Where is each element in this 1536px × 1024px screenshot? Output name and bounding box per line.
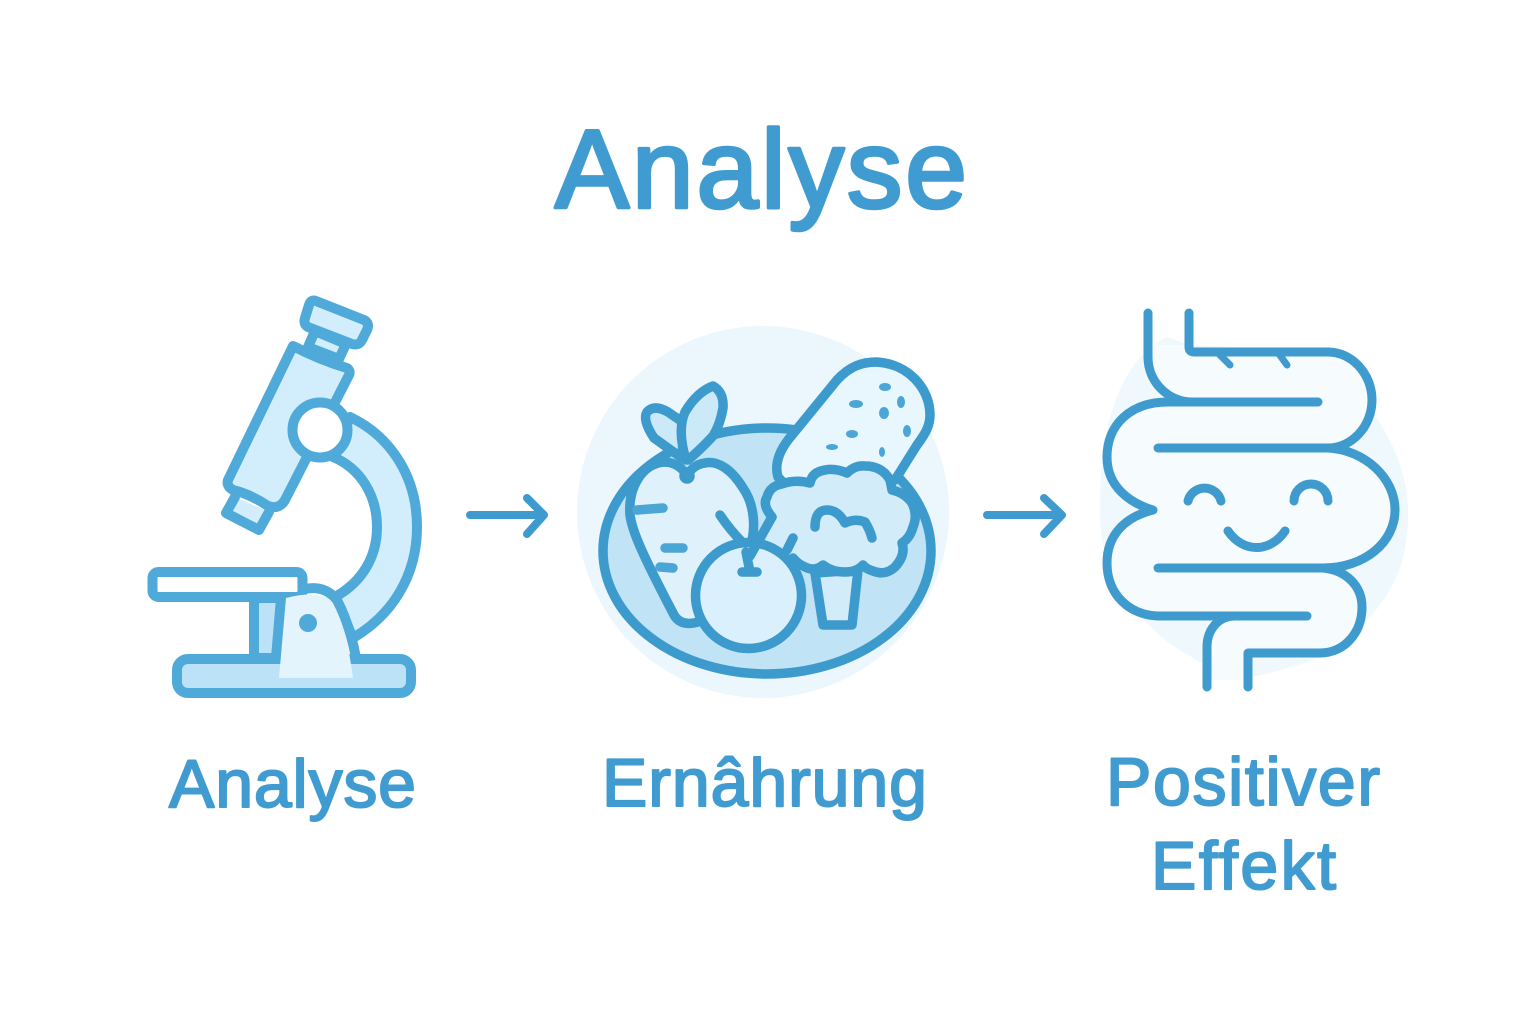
apple [696, 542, 802, 648]
broccoli stem [815, 570, 858, 625]
microscope knob [299, 614, 317, 632]
microscope pillar band [271, 598, 287, 658]
cucumber [777, 362, 930, 500]
plate [603, 428, 931, 674]
background blob [1100, 337, 1408, 678]
microscope arm [333, 417, 417, 638]
label: Positiver Effekt: Effekt [1151, 828, 1336, 904]
microscope body [279, 594, 353, 678]
carrot [630, 462, 754, 623]
intestine small ticks [1219, 354, 1287, 365]
label: Analyse: Analyse [169, 746, 416, 822]
intestine outline left loops [1107, 402, 1307, 616]
microscope eyepiece [304, 300, 368, 344]
label: Ernährung: Ernâhrung [602, 745, 927, 821]
title: Analyse [555, 108, 967, 232]
intestine outline right loop [1158, 448, 1395, 568]
label: Positiver Effekt [1106, 744, 1380, 904]
background circle [577, 326, 949, 698]
icon: microscope [152, 300, 417, 693]
microscope objective lens [226, 497, 269, 530]
microscope base [177, 659, 411, 693]
intestine outline top left [1148, 313, 1318, 402]
microscope body outline [305, 588, 356, 658]
intestine interior [1107, 345, 1395, 680]
intestine outline bottom [1207, 616, 1240, 687]
broccoli connecting lines [750, 517, 793, 556]
microscope tube [228, 346, 350, 507]
arrow: analyse to nutrition [470, 498, 544, 534]
face: left eye [1188, 488, 1221, 501]
microscope pillar [254, 598, 282, 658]
intestine outline lower right [1248, 568, 1362, 687]
microscope joint circle [292, 402, 348, 458]
broccoli crown [760, 466, 915, 573]
carrot leaves [646, 386, 723, 460]
icon: happy intestine [1100, 313, 1408, 687]
microscope neck [308, 331, 346, 359]
label: Positiver Effekt: Positiver [1106, 744, 1380, 820]
face: smile [1228, 531, 1285, 548]
microscope stage [152, 572, 302, 597]
face: right eye [1294, 484, 1328, 501]
arrow: nutrition to positive effect [987, 498, 1062, 534]
icon: food plate [577, 326, 949, 698]
intestine outline top right [1158, 313, 1372, 448]
